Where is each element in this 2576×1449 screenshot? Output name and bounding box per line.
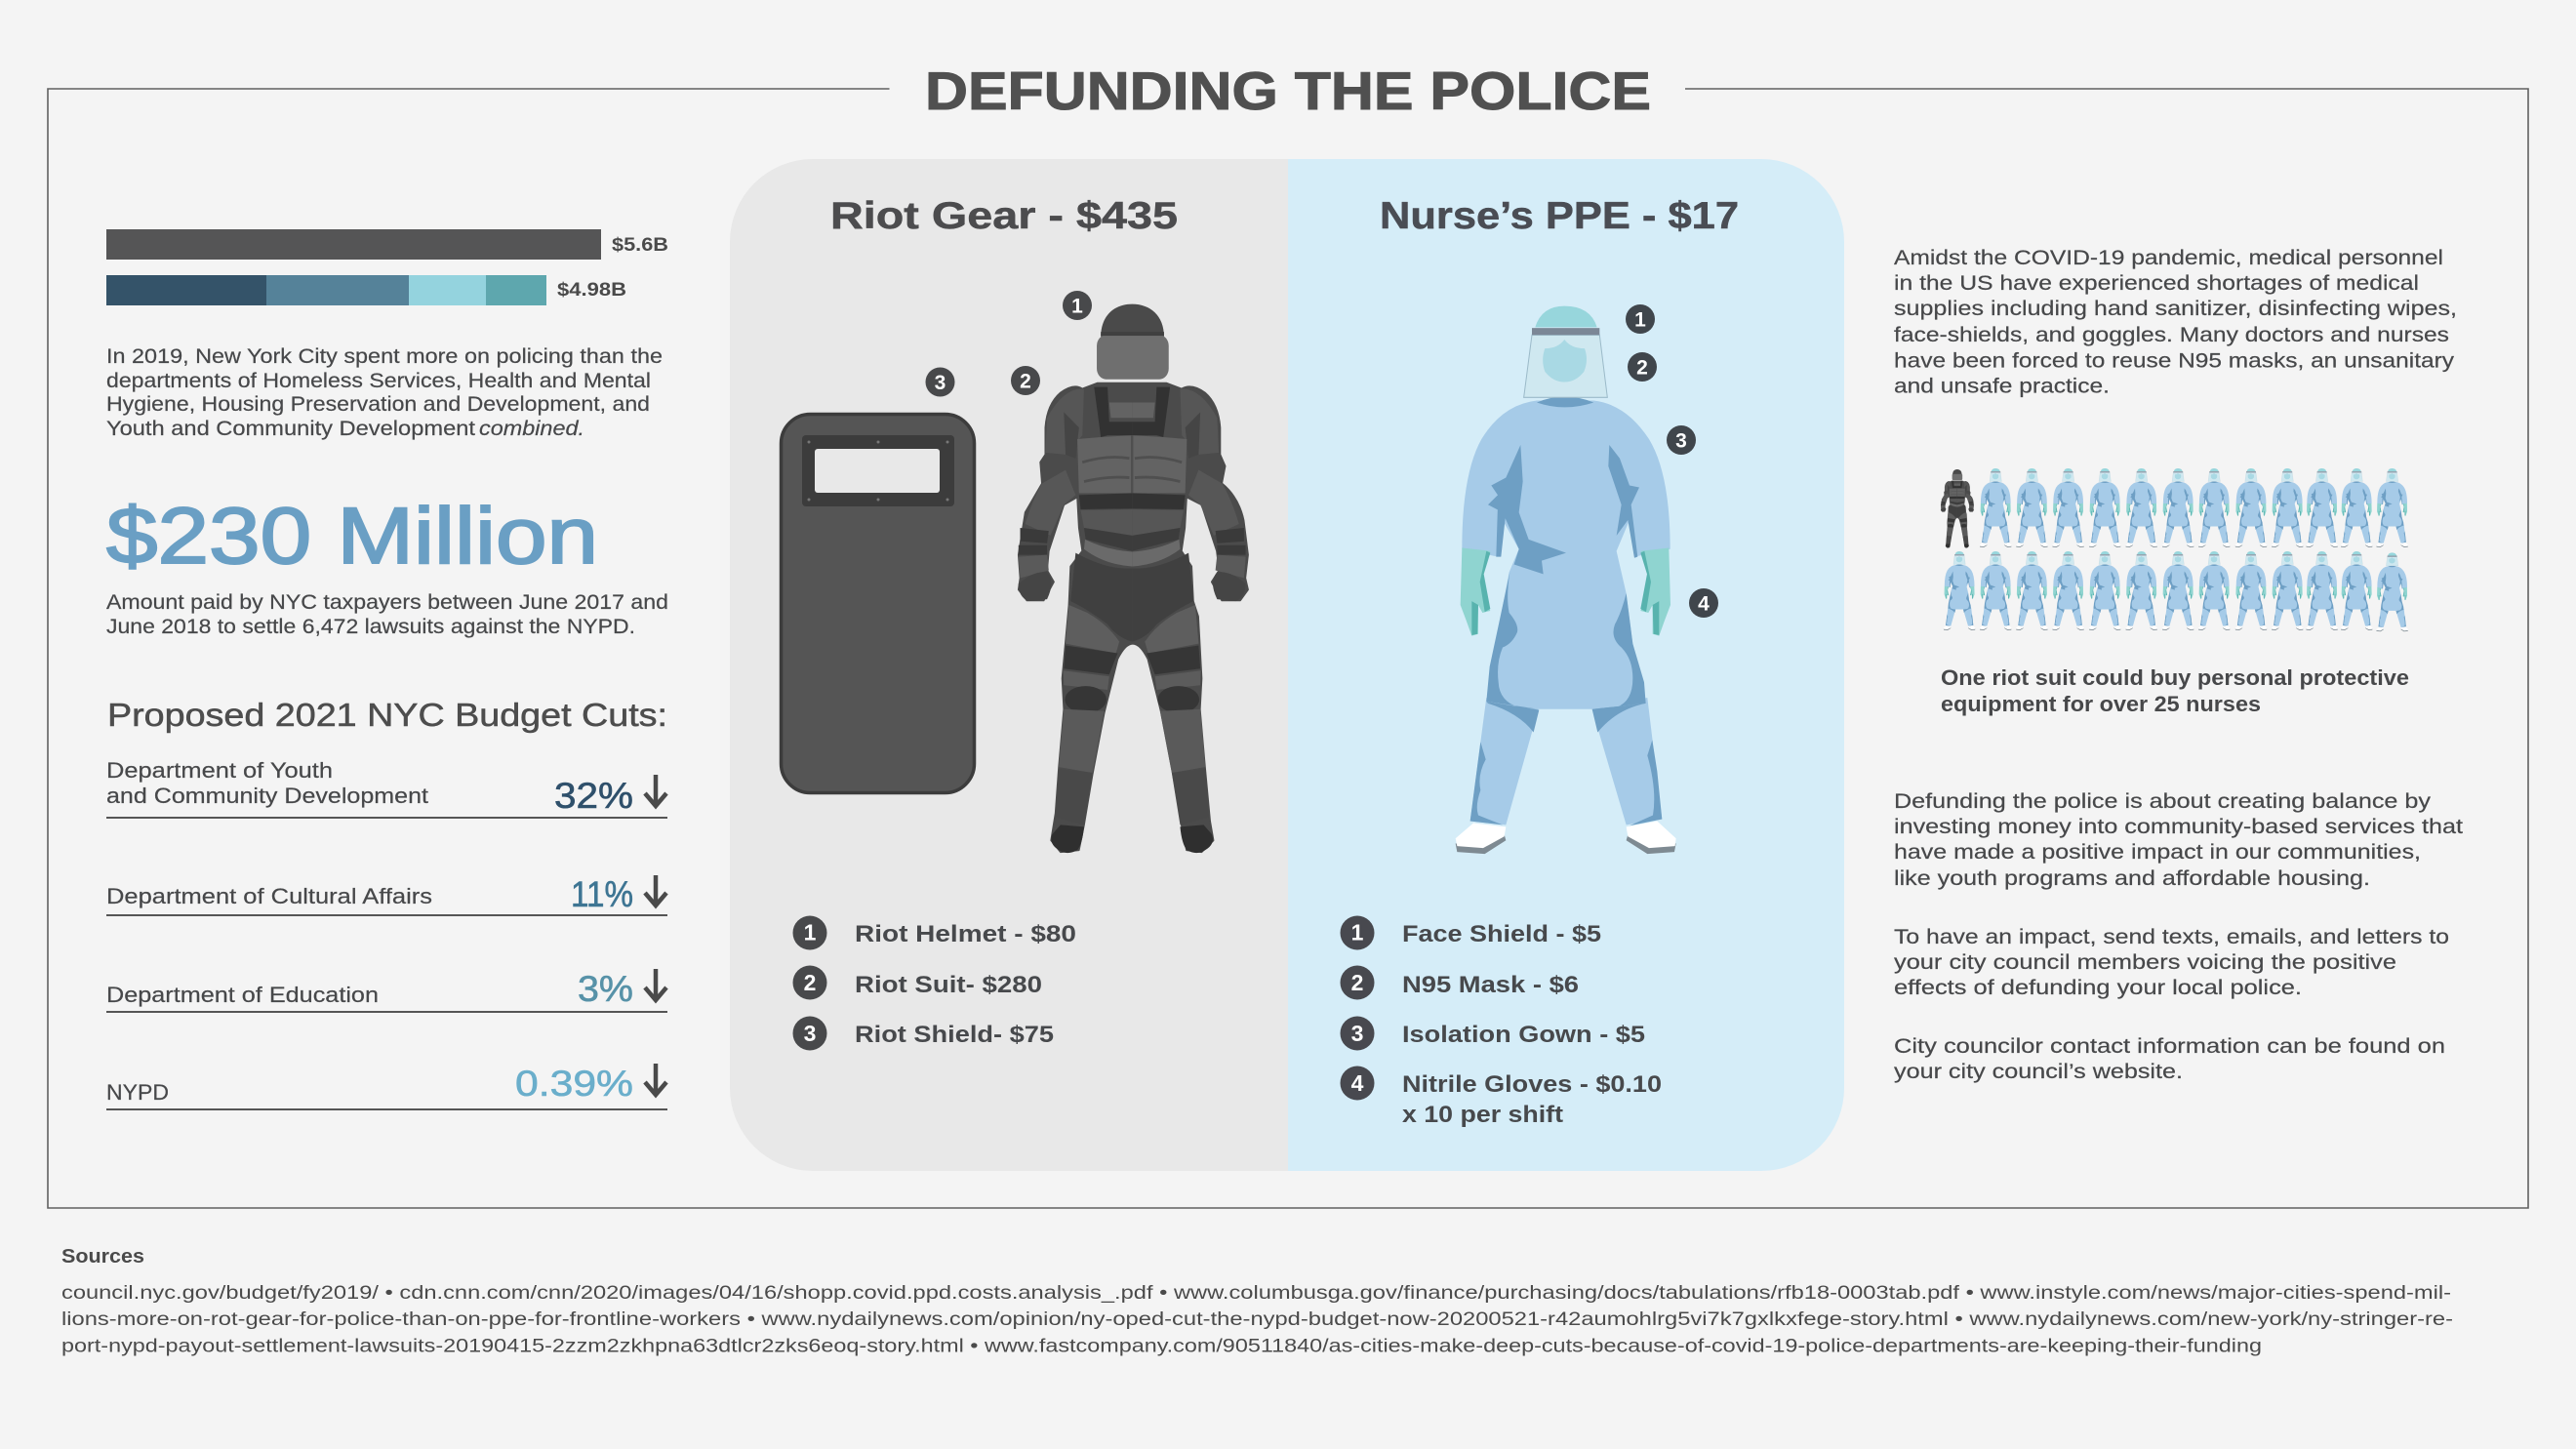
list: riot suit — [792, 966, 1042, 999]
text: what defunding means: investing money into community-based services that — [1894, 815, 2463, 838]
list: riot suit: Riot Suit- $280 — [855, 972, 1042, 998]
text: medical shortages — [1894, 246, 2457, 398]
heading: Proposed 2021 NYC Budget Cuts: — [107, 697, 667, 733]
icons: nurse units — [1944, 468, 2408, 631]
bar: police budget: $5.6B — [612, 235, 668, 256]
sources: council.nyc.gov/budget/fy2019/ • cdn.cnn.com/cnn/2020/images/04/16/shopp.covid.ppd.costs.analysis_.pdf • www.columbusga.gov/finance/purchasing/docs/tabulations/rfb18-0003tab.pdf • www.instyle.com/news/major-cities-spend-mil- — [61, 1282, 2451, 1304]
list: isolation gown: 3 — [1351, 1021, 1363, 1046]
sources: Sources — [61, 1246, 144, 1268]
row: NYPD: 0.39% — [515, 1064, 633, 1104]
badge: nurse 3 — [1667, 425, 1696, 455]
panel: spending comparison bars — [106, 229, 668, 440]
text: call to action: To have an impact, send texts, emails, and letters to — [1894, 925, 2449, 948]
list: riot shield: Riot Shield- $75 — [855, 1022, 1054, 1048]
text: call to action — [1894, 925, 2449, 999]
text: policing spend explanation: combined. — [479, 417, 584, 440]
list: riot helmet: 1 — [804, 919, 817, 945]
panel: proposed budget cuts — [106, 697, 667, 1109]
list: nitrile gloves: Nitrile Gloves - $0.10 — [1402, 1071, 1662, 1098]
big number: settlements — [106, 492, 668, 638]
icon: riot suit unit — [1941, 469, 1974, 547]
badge: riot 3: 3 — [935, 372, 946, 394]
title: DEFUNDING THE POLICE — [925, 60, 1651, 121]
list: riot suit: 2 — [804, 970, 816, 995]
text: medical shortages: have been forced to reuse N95 masks, an unsanitary — [1894, 349, 2454, 373]
text: policing spend explanation: Youth and Community Development — [106, 417, 475, 440]
list: face shield: 1 — [1351, 919, 1364, 945]
text: policing spend explanation: In 2019, New York City spent more on policing than the — [106, 344, 663, 368]
text: what defunding means: have made a positive impact in our communities, — [1894, 840, 2421, 864]
text: policing spend explanation — [106, 344, 663, 440]
icon: nurse figure — [1456, 306, 1676, 854]
text: policing spend explanation: departments of Homeless Services, Health and Mental — [106, 369, 651, 392]
heading: nurse PPE: Nurse’s PPE - $17 — [1380, 195, 1739, 237]
caption — [1941, 665, 2409, 716]
badge: riot 2: 2 — [1020, 371, 1031, 392]
text: medical shortages: Amidst the COVID-19 pandemic, medical personnel — [1894, 246, 2443, 269]
list: face shield — [1341, 915, 1601, 950]
badge: nurse 2: 2 — [1636, 357, 1648, 379]
panel: riot gear — [730, 159, 1288, 1171]
row: youth and community development: and Community Development — [106, 784, 428, 808]
text: what defunding means: like youth programs and affordable housing. — [1894, 866, 2370, 890]
row: youth and community development: Department of Youth — [106, 758, 333, 783]
caption: One riot suit could buy personal protective — [1941, 665, 2409, 690]
bar: combined departments: $4.98B — [557, 280, 626, 301]
text: what defunding means: Defunding the police is about creating balance by — [1894, 789, 2431, 813]
badge: nurse 3: 3 — [1675, 429, 1687, 453]
caption: equipment for over 25 nurses — [1941, 692, 2261, 716]
row: cultural affairs: 11% — [571, 874, 633, 914]
badge: riot 3 — [925, 367, 954, 396]
list: N95 mask: 2 — [1351, 970, 1363, 995]
list: N95 mask: N95 Mask - $6 — [1402, 972, 1579, 998]
badge: nurse 2 — [1628, 352, 1657, 382]
icon: riot suit figure — [1019, 304, 1248, 853]
badge: nurse 4: 4 — [1698, 593, 1710, 615]
text: contact information — [1894, 1034, 2445, 1083]
bar: combined departments — [106, 275, 626, 305]
row: education: Department of Education — [106, 983, 379, 1007]
list: face shield: Face Shield - $5 — [1402, 921, 1601, 947]
bar: police budget — [106, 229, 668, 260]
row: education — [106, 969, 667, 1012]
row: education: 3% — [578, 969, 633, 1009]
list: N95 mask — [1341, 966, 1579, 999]
panel: nurse PPE — [1288, 159, 1844, 1171]
badge: nurse 1 — [1626, 304, 1655, 334]
badge: riot 1: 1 — [1071, 295, 1083, 318]
list: isolation gown: Isolation Gown - $5 — [1402, 1022, 1645, 1048]
badge: nurse 1: 1 — [1634, 308, 1646, 332]
badge: riot 1 — [1063, 291, 1092, 320]
text: policing spend explanation: Hygiene, Housing Preservation and Development, and — [106, 392, 650, 416]
sources: port-nypd-payout-settlement-lawsuits-20190415-2zzm2zkhpna63dtlcr2zks6eoq-story.html • www.fastcompany.com/90511840/as-cities-make-deep-cuts-because-of-covid-19-police-departments-are-keeping-their-funding — [61, 1335, 2262, 1356]
list: riot helmet — [792, 915, 1076, 950]
row: youth and community development — [106, 758, 667, 818]
big number: settlements: Amount paid by NYC taxpayers between June 2017 and — [106, 590, 668, 614]
text: what defunding means — [1894, 789, 2463, 890]
list: riot shield: 3 — [804, 1021, 816, 1046]
text: contact information: City councilor contact information can be found on — [1894, 1034, 2445, 1058]
text: contact information: your city council’s website. — [1894, 1060, 2183, 1083]
text: call to action: your city council members voicing the positive — [1894, 950, 2396, 974]
badge: riot 2 — [1011, 366, 1040, 395]
big number: settlements: $230 Million — [106, 492, 598, 581]
pictogram: one riot suit equals 25 nurses — [1941, 468, 2409, 716]
list: isolation gown — [1341, 1017, 1645, 1050]
list: nitrile gloves: 4 — [1351, 1070, 1364, 1096]
badge: nurse 4 — [1689, 588, 1718, 618]
list: nitrile gloves — [1341, 1066, 1662, 1128]
row: youth and community development: 32% — [554, 776, 633, 816]
text: medical shortages: in the US have experienced shortages of medical — [1894, 271, 2419, 295]
row: NYPD: NYPD — [106, 1080, 169, 1105]
sources: lions-more-on-rot-gear-for-police-than-on-ppe-for-frontline-workers • www.nydailynews.com/opinion/ny-oped-cut-the-nypd-budget-now-20200521-r42aumohlrg5vi7k7gxlkxfege-story.html • www.nydailynews.com/new-york/ny-stringer-re- — [61, 1308, 2453, 1330]
list: riot shield — [792, 1017, 1054, 1050]
row: cultural affairs: Department of Cultural Affairs — [106, 884, 432, 908]
text: call to action: effects of defunding your local police. — [1894, 976, 2302, 999]
list: nitrile gloves: x 10 per shift — [1402, 1102, 1563, 1128]
text: medical shortages: face-shields, and goggles. Many doctors and nurses — [1894, 323, 2449, 346]
row: NYPD — [106, 1064, 667, 1109]
text: medical shortages: and unsafe practice. — [1894, 375, 2110, 398]
row: cultural affairs — [106, 874, 667, 915]
sources — [61, 1246, 2453, 1356]
list: riot helmet: Riot Helmet - $80 — [855, 921, 1076, 947]
icon: riot shield — [781, 414, 974, 792]
heading: riot gear: Riot Gear - $435 — [830, 195, 1178, 237]
big number: settlements: June 2018 to settle 6,472 lawsuits against the NYPD. — [106, 615, 635, 638]
text: medical shortages: supplies including hand sanitizer, disinfecting wipes, — [1894, 297, 2457, 320]
